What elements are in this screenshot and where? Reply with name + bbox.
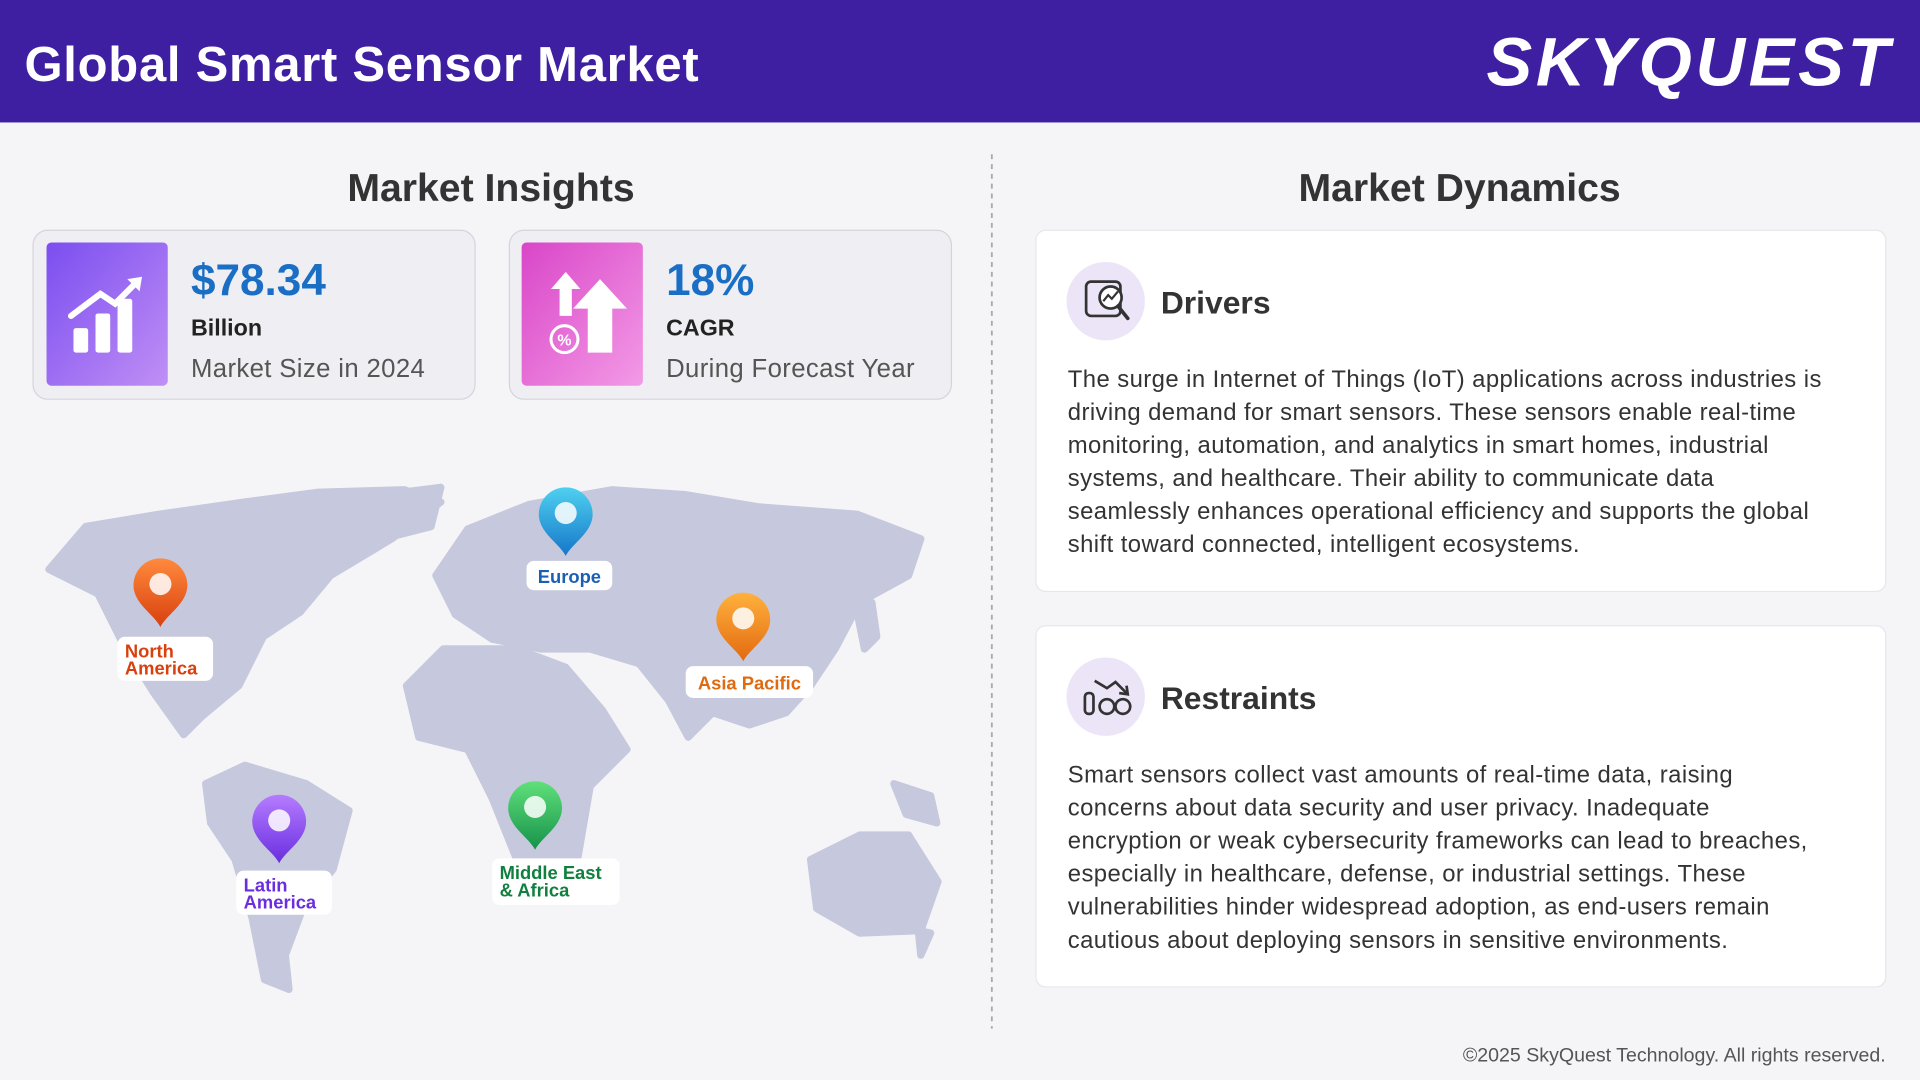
card: market size: $78.34 bbox=[191, 256, 326, 305]
card: CAGR: 18% bbox=[666, 256, 754, 305]
icon: bar chart bbox=[47, 242, 168, 386]
icon: growth arrow bbox=[522, 242, 643, 386]
icon: drivers bbox=[1067, 262, 1145, 340]
card: CAGR: During Forecast Year bbox=[666, 355, 915, 383]
pin: asia pacific bbox=[686, 593, 813, 698]
panel: drivers: The surge in Internet of Things (IoT) applications across industries is bbox=[1068, 366, 1822, 393]
panel: restraints: cautious about deploying sensors in sensitive environments. bbox=[1068, 927, 1728, 954]
panel: restraints: Smart sensors collect vast amounts of real-time data, raising bbox=[1068, 761, 1733, 788]
pin: europe bbox=[527, 487, 612, 590]
panel: restraints: Restraints bbox=[1161, 680, 1316, 716]
card: market size: Billion bbox=[191, 315, 262, 341]
panel: restraints: vulnerabilities hinder widespread adoption, as end-users remain bbox=[1068, 894, 1770, 921]
header bar bbox=[0, 0, 1920, 122]
pin: north america bbox=[118, 558, 213, 681]
panel: restraints: concerns about data security and user privacy. Inadequate bbox=[1068, 795, 1710, 822]
panel: drivers: shift toward connected, intelligent ecosystems. bbox=[1068, 531, 1580, 558]
pin: latin america: America bbox=[244, 892, 317, 913]
pin: latin america: Latin bbox=[244, 874, 288, 895]
panel: drivers: systems, and healthcare. Their ability to communicate data bbox=[1068, 465, 1714, 492]
card: market size: Market Size in 2024 bbox=[191, 355, 425, 383]
pin: north america: America bbox=[125, 658, 198, 679]
icon: restraints bbox=[1067, 658, 1145, 736]
pin: europe: Europe bbox=[538, 566, 601, 587]
card: CAGR: CAGR bbox=[666, 315, 735, 341]
panel: drivers: driving demand for smart sensors. These sensors enable real-time bbox=[1068, 399, 1796, 426]
panel: drivers bbox=[1036, 230, 1886, 591]
footer: ©2025 SkyQuest Technology. All rights reserved. bbox=[1463, 1045, 1886, 1067]
title: Global Smart Sensor Market bbox=[24, 38, 699, 92]
pin: latin america bbox=[236, 795, 332, 915]
pin: middle east & africa: Middle East bbox=[500, 862, 602, 883]
panel: drivers: seamlessly enhances operational efficiency and supports the global bbox=[1068, 498, 1809, 525]
pin: middle east & africa: & Africa bbox=[500, 879, 570, 900]
panel: restraints: encryption or weak cybersecurity frameworks can lead to breaches, bbox=[1068, 828, 1808, 855]
logo: SKYQUEST bbox=[1486, 24, 1894, 101]
panel: restraints: especially in healthcare, defense, or industrial settings. These bbox=[1068, 861, 1746, 888]
world map bbox=[49, 487, 938, 989]
heading: market insights: Market Insights bbox=[347, 167, 635, 210]
pin: middle east & africa bbox=[492, 781, 620, 905]
icon: growth arrow: % bbox=[557, 332, 572, 349]
card: CAGR bbox=[509, 230, 951, 399]
panel: restraints bbox=[1036, 626, 1886, 987]
panel: drivers: monitoring, automation, and analytics in smart homes, industrial bbox=[1068, 432, 1769, 459]
heading: market dynamics: Market Dynamics bbox=[1298, 167, 1621, 210]
pin: north america: North bbox=[125, 641, 174, 662]
card: market size bbox=[33, 230, 475, 399]
pin: asia pacific: Asia Pacific bbox=[698, 672, 801, 693]
panel: drivers: Drivers bbox=[1161, 284, 1271, 320]
